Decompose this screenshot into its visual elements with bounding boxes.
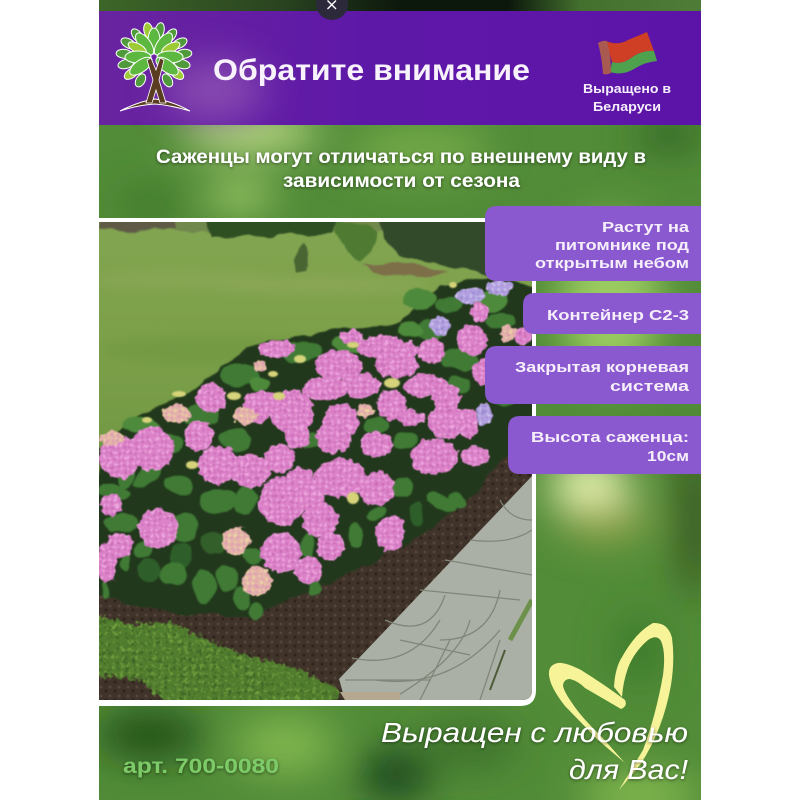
info badge: seedling height bbox=[508, 416, 701, 474]
photo frame bbox=[99, 218, 536, 706]
background: blurred green bokeh bbox=[99, 125, 701, 800]
paving joints bbox=[345, 500, 532, 700]
heading: Обратите внимание bbox=[213, 54, 530, 87]
subtitle bbox=[156, 147, 646, 192]
flag of Belarus bbox=[598, 32, 657, 74]
info badge: closed root system bbox=[485, 346, 701, 404]
info badge: closed root system: Закрытая корневая bbox=[515, 359, 689, 376]
tagline: Выращен с любовью bbox=[381, 717, 688, 748]
flag green field bbox=[610, 51, 657, 73]
tagline bbox=[381, 717, 688, 785]
info badge: open air nursery: Растут на bbox=[602, 219, 690, 236]
header banner bbox=[99, 11, 701, 125]
flag caption: Выращено в bbox=[583, 81, 671, 96]
info badge: seedling height: 10см bbox=[647, 448, 689, 465]
foreground grass bbox=[99, 614, 340, 700]
flag caption: Беларуси bbox=[593, 99, 661, 114]
lawn bbox=[99, 222, 532, 480]
lilac flowers bbox=[430, 281, 514, 425]
info badge: seedling height: Высота саженца: bbox=[531, 429, 689, 446]
bush foliage bbox=[90, 276, 540, 619]
info badge: open air nursery: питомнике под bbox=[555, 237, 690, 254]
close button bbox=[316, 0, 348, 20]
subtitle: Саженцы могут отличаться по внешнему виду в bbox=[156, 147, 646, 168]
hydrangea flowers bbox=[96, 302, 531, 584]
info badge: open air nursery: открытым небом bbox=[535, 255, 689, 272]
pale flowers bbox=[99, 326, 516, 596]
tree trunk bbox=[146, 58, 166, 103]
top dark strip bbox=[99, 0, 701, 11]
tagline: для Вас! bbox=[569, 754, 688, 785]
icon: yellow heart bbox=[549, 623, 673, 790]
flag caption bbox=[583, 81, 671, 114]
flag red field bbox=[606, 32, 654, 63]
subtitle: зависимости от сезона bbox=[283, 171, 520, 192]
paving path bbox=[339, 476, 532, 700]
info badge: open air nursery bbox=[485, 206, 701, 281]
article number: арт. 700-0080 bbox=[123, 755, 279, 778]
info badge: container bbox=[523, 293, 701, 334]
tree leaves bbox=[116, 22, 192, 89]
logo: tree bbox=[116, 22, 192, 111]
leaves bbox=[100, 290, 526, 619]
yellow buds bbox=[142, 282, 457, 504]
soil bed bbox=[99, 454, 532, 700]
background trees and hedge bbox=[99, 222, 487, 278]
banner highlight bbox=[165, 60, 265, 120]
flag ornament bbox=[598, 41, 611, 74]
info badge: closed root system: система bbox=[610, 378, 690, 395]
tree ground bbox=[120, 99, 190, 111]
info badge: container: Контейнер С2-3 bbox=[547, 307, 689, 324]
photo: hydrangea garden bbox=[90, 218, 540, 706]
